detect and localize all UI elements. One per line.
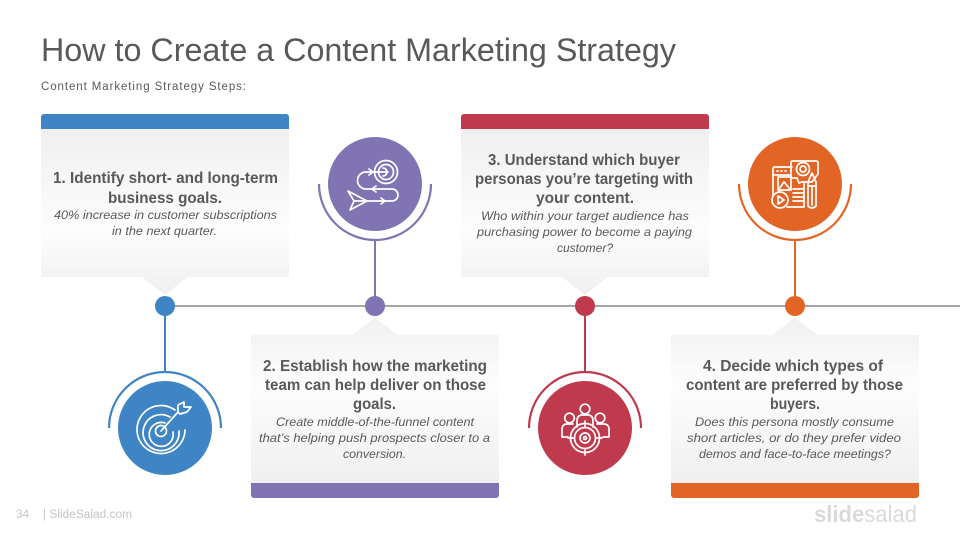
step 2 description: conversion. xyxy=(343,449,406,461)
step 2 description xyxy=(259,417,490,461)
step 4 description: short articles, or do they prefer video xyxy=(687,433,902,445)
step 3 description xyxy=(476,211,693,255)
step 1 description: in the next quarter. xyxy=(112,226,217,238)
step 1 description: 40% increase in customer subscriptions xyxy=(54,210,277,222)
step 4 heading: content are preferred by those xyxy=(686,377,903,394)
step 3 description: Who within your target audience has xyxy=(481,211,689,223)
step 1 heading xyxy=(53,170,278,207)
step 4 description: Does this persona mostly consume xyxy=(695,417,894,429)
step 1 heading: 1. Identify short- and long-term xyxy=(53,170,278,187)
step 4 heading xyxy=(686,358,903,413)
panel: step 3 xyxy=(461,114,709,295)
step 4 heading: 4. Decide which types of xyxy=(703,358,884,375)
step 2 description: Create middle-of-the-funnel content xyxy=(276,417,475,429)
step 2 heading: team can help deliver on those xyxy=(265,377,486,394)
subtitle: Content Marketing Strategy Steps: xyxy=(41,81,246,93)
step 3 heading: 3. Understand which buyer xyxy=(488,152,680,169)
footer site name: | SlideSalad.com xyxy=(43,509,132,521)
panel: step 2 xyxy=(251,318,499,498)
timeline node 3 with icon: audience target xyxy=(529,296,641,475)
icon: paper plane route to target xyxy=(348,160,398,210)
title: How to Create a Content Marketing Strategy xyxy=(41,32,676,68)
step 2 description: that’s helping push prospects closer to a xyxy=(259,433,490,445)
step 3 heading: personas you’re targeting with xyxy=(475,171,693,188)
card body xyxy=(671,318,919,483)
step 2 heading: 2. Establish how the marketing xyxy=(263,358,487,375)
icon: people with target xyxy=(562,404,609,455)
step 3 heading xyxy=(475,152,693,207)
card header bar xyxy=(461,114,709,129)
timeline node 2 with icon: path to target xyxy=(319,137,431,316)
step 3 heading: your content. xyxy=(536,190,634,207)
step 2 heading: goals. xyxy=(353,396,396,413)
icon: window, speech bubble, video and pencil xyxy=(772,161,818,208)
timeline node 1 with icon: target xyxy=(109,296,221,475)
step 3 description: purchasing power to become a paying xyxy=(476,227,693,239)
step 1 heading: business goals. xyxy=(108,190,222,207)
panel: step 1 xyxy=(41,114,289,295)
panel: step 4 xyxy=(671,318,919,498)
card footer bar xyxy=(671,483,919,498)
timeline node 4 with icon: content types xyxy=(739,137,851,316)
logo: slidesalad: slidesalad xyxy=(814,501,917,527)
icon: target with arrow xyxy=(137,402,191,453)
step 4 heading: buyers. xyxy=(770,396,820,413)
step 4 description: demos and face-to-face meetings? xyxy=(699,449,892,461)
card body xyxy=(41,129,289,295)
card header bar xyxy=(41,114,289,129)
card body xyxy=(251,318,499,483)
step 4 description xyxy=(687,417,902,461)
step 3 description: customer? xyxy=(557,243,614,255)
timeline line xyxy=(165,305,960,307)
card body xyxy=(461,129,709,295)
page number: 34 xyxy=(16,509,30,521)
card footer bar xyxy=(251,483,499,498)
step 1 description xyxy=(54,210,277,238)
step 2 heading xyxy=(263,358,487,413)
